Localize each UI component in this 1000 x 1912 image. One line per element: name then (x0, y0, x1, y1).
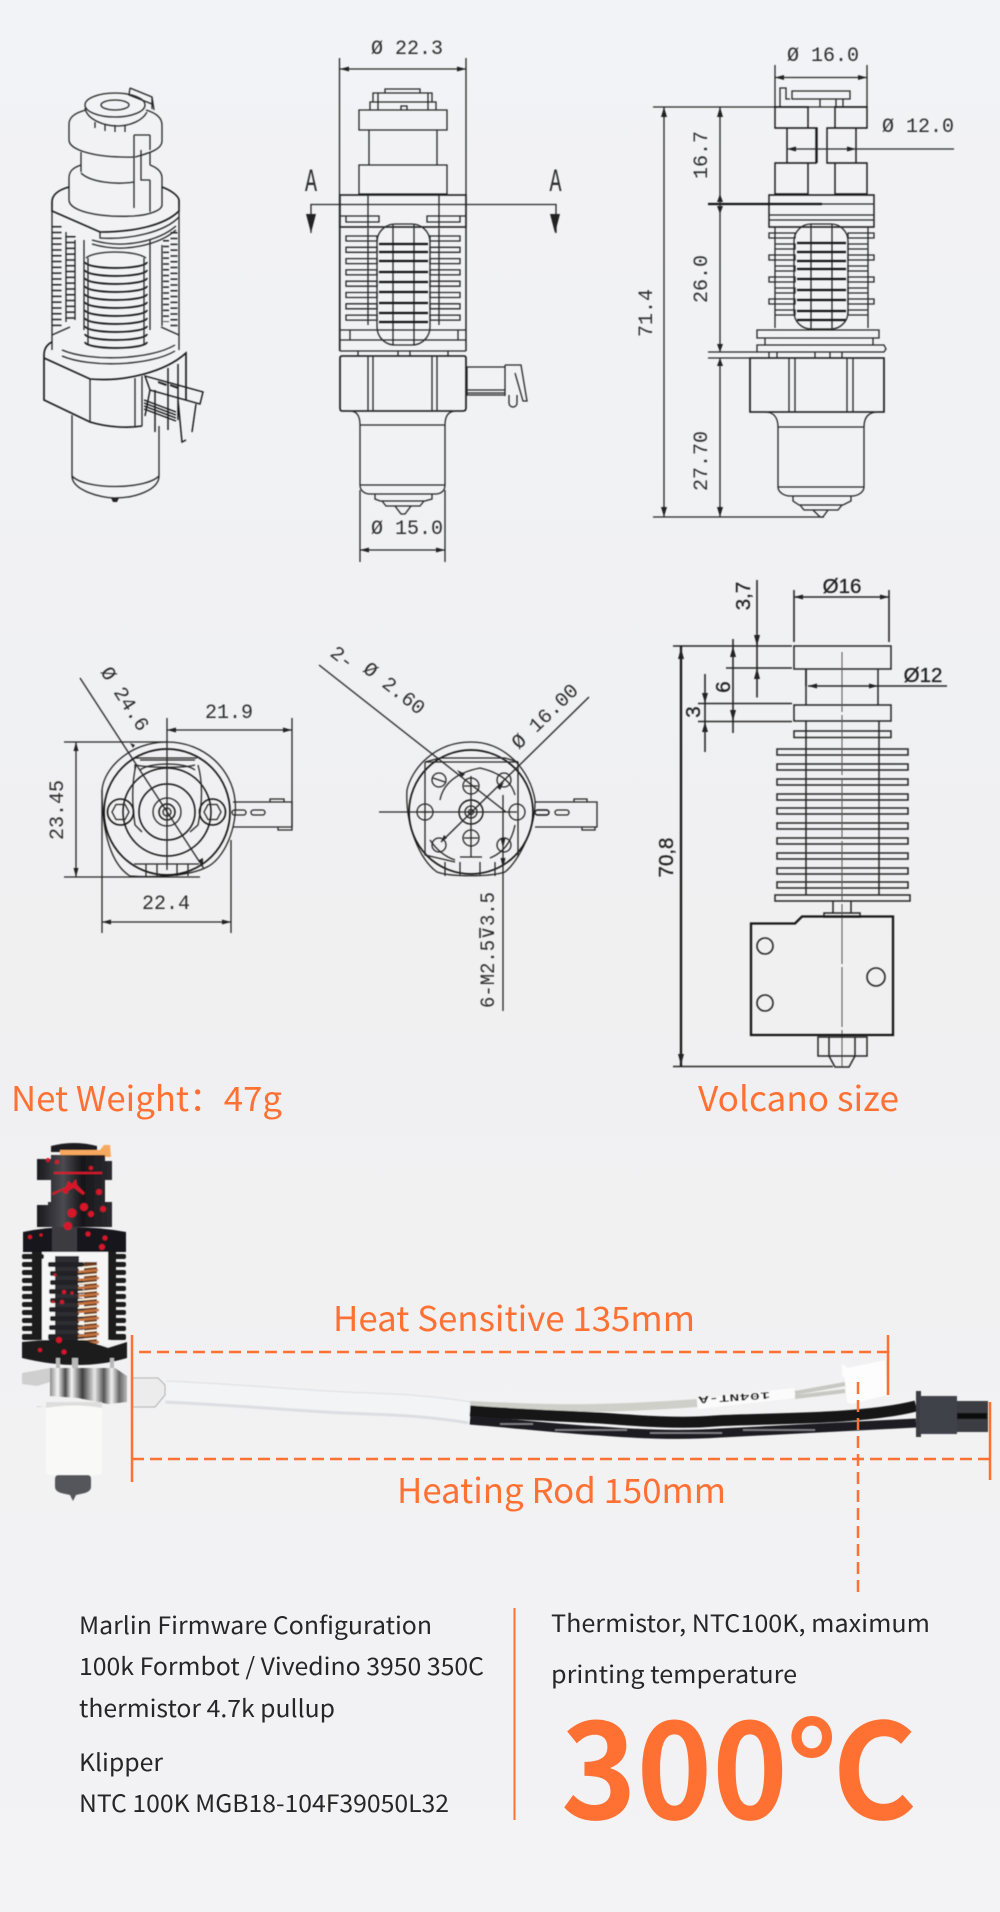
hex bolts (108, 799, 226, 825)
thermistor wire (470, 1403, 697, 1408)
dimension: 22.4 (102, 790, 231, 933)
volcano size drawing with dimensions (655, 575, 947, 1067)
dimension: diameter 16.0: Ø 16.0 (787, 45, 859, 68)
volcano dimension labels: Ø16 (823, 575, 861, 598)
dimension: diameter 22.3: Ø 22.3 (371, 38, 443, 61)
dimension: 23.45 (47, 742, 200, 877)
text block: firmware configuration: Klipper (79, 1743, 164, 1778)
volcano dimension labels: Ø12 (904, 664, 942, 687)
white thermistor plug (842, 1360, 887, 1404)
red paint splatter (28, 1158, 108, 1354)
dimension: diameter 12.0 (787, 116, 954, 152)
dimension: 21.9: 21.9 (205, 702, 253, 725)
volcano dimension labels (655, 575, 942, 877)
dimension: diameter 15.0 (360, 490, 445, 562)
dimension: diameter 16.0 (775, 45, 867, 107)
black plug (916, 1391, 988, 1437)
dimension: diameter 15.0: Ø 15.0 (371, 518, 443, 541)
text block: firmware configuration: NTC 100K MGB18-104F39050L32 (79, 1784, 449, 1819)
text block: firmware configuration: thermistor 4.7k pullup (79, 1689, 335, 1724)
black heater wires (470, 1406, 916, 1422)
text block: firmware configuration: Marlin Firmware Configuration (79, 1606, 432, 1641)
metal crimp (132, 1378, 165, 1407)
volcano dimension lines (673, 580, 947, 1066)
heat sink fins (22, 1252, 126, 1340)
dimension callouts: heat sensitive and heating rod: Heating Rod 150mm (397, 1464, 726, 1513)
connector end (535, 799, 597, 830)
divider (514, 1608, 516, 1820)
label: 2 minus diameter 2.60: Ø 2.60 (358, 658, 429, 721)
dimension labels vertical: 27.70 (691, 431, 714, 491)
label: 2 minus diameter 2.60 (325, 642, 429, 721)
white ceramic sleeve (46, 1402, 102, 1475)
thermistor wires (795, 1384, 845, 1397)
heading: net weight: Net Weight：47g (11, 1072, 282, 1121)
section A-A markers: A (305, 164, 317, 201)
connector end (232, 799, 292, 830)
text block: thermistor (551, 1604, 930, 1690)
thermistor label (697, 1388, 796, 1409)
thermistor label: 104NT-A (698, 1388, 770, 1404)
white sleeve (166, 1392, 470, 1413)
dimension: 23.45: 23.45 (47, 780, 70, 840)
dimension: diameter 12.0: Ø 12.0 (882, 116, 954, 139)
section A-A markers (305, 164, 562, 233)
side view drawing with dimensions (636, 45, 954, 517)
dimension: 22.4: 22.4 (142, 893, 190, 916)
label: diameter 16.00: Ø 16.00 (508, 680, 584, 755)
isometric line drawing of hotend (44, 88, 203, 502)
big temperature figure: 300℃ (561, 1667, 916, 1858)
front view drawing with dimensions (305, 38, 562, 562)
label: 6-M2.5 depth 3.5: 6-M2.5⊽3.5 (478, 892, 501, 1008)
text block: thermistor: printing temperature (551, 1655, 797, 1690)
silver heater block (22, 1368, 127, 1407)
nozzle (55, 1475, 91, 1501)
text block: firmware configuration (79, 1606, 484, 1819)
label: 2 minus diameter 2.60: 2- (325, 642, 358, 675)
dimension labels vertical: 16.7 (691, 131, 714, 179)
connector side view (467, 365, 527, 407)
dimension labels vertical (636, 131, 714, 491)
product photo: cables and connectors (132, 1360, 988, 1437)
heading: volcano size: Volcano size (698, 1072, 899, 1121)
dimension callouts: heat sensitive and heating rod (132, 1292, 990, 1592)
heat break fins (48, 1256, 84, 1340)
dimension: 21.9 (167, 702, 292, 827)
dimension: diameter 24.6: Ø 24.6 (94, 663, 153, 736)
screw holes (417, 773, 525, 857)
bottom view left with dimensions (47, 663, 292, 933)
dimension: diameter 22.3 (340, 38, 466, 351)
dimension callouts: heat sensitive and heating rod: Heat Sensitive 135mm (333, 1292, 695, 1341)
text block: firmware configuration: 100k Formbot / Vivedino 3950 350C (79, 1647, 484, 1682)
text block: thermistor: Thermistor, NTC100K, maximum (551, 1604, 930, 1639)
dimension labels vertical: 26.0 (691, 255, 714, 303)
section A-A markers: A (550, 164, 562, 201)
volcano dimension labels: 6 (712, 681, 735, 693)
dimension labels vertical: 71.4 (636, 289, 659, 337)
iso coil (85, 252, 147, 348)
volcano dimension labels: 3 (682, 706, 705, 718)
iso heat sink fins (57, 226, 174, 328)
copper coil (78, 1262, 99, 1344)
bottom view right with dimensions (319, 642, 597, 1011)
heat sink window (40, 1252, 110, 1344)
volcano dimension labels: 3,7 (732, 582, 755, 610)
product photo: hotend (22, 1143, 127, 1501)
volcano dimension labels: 70,8 (655, 838, 678, 877)
